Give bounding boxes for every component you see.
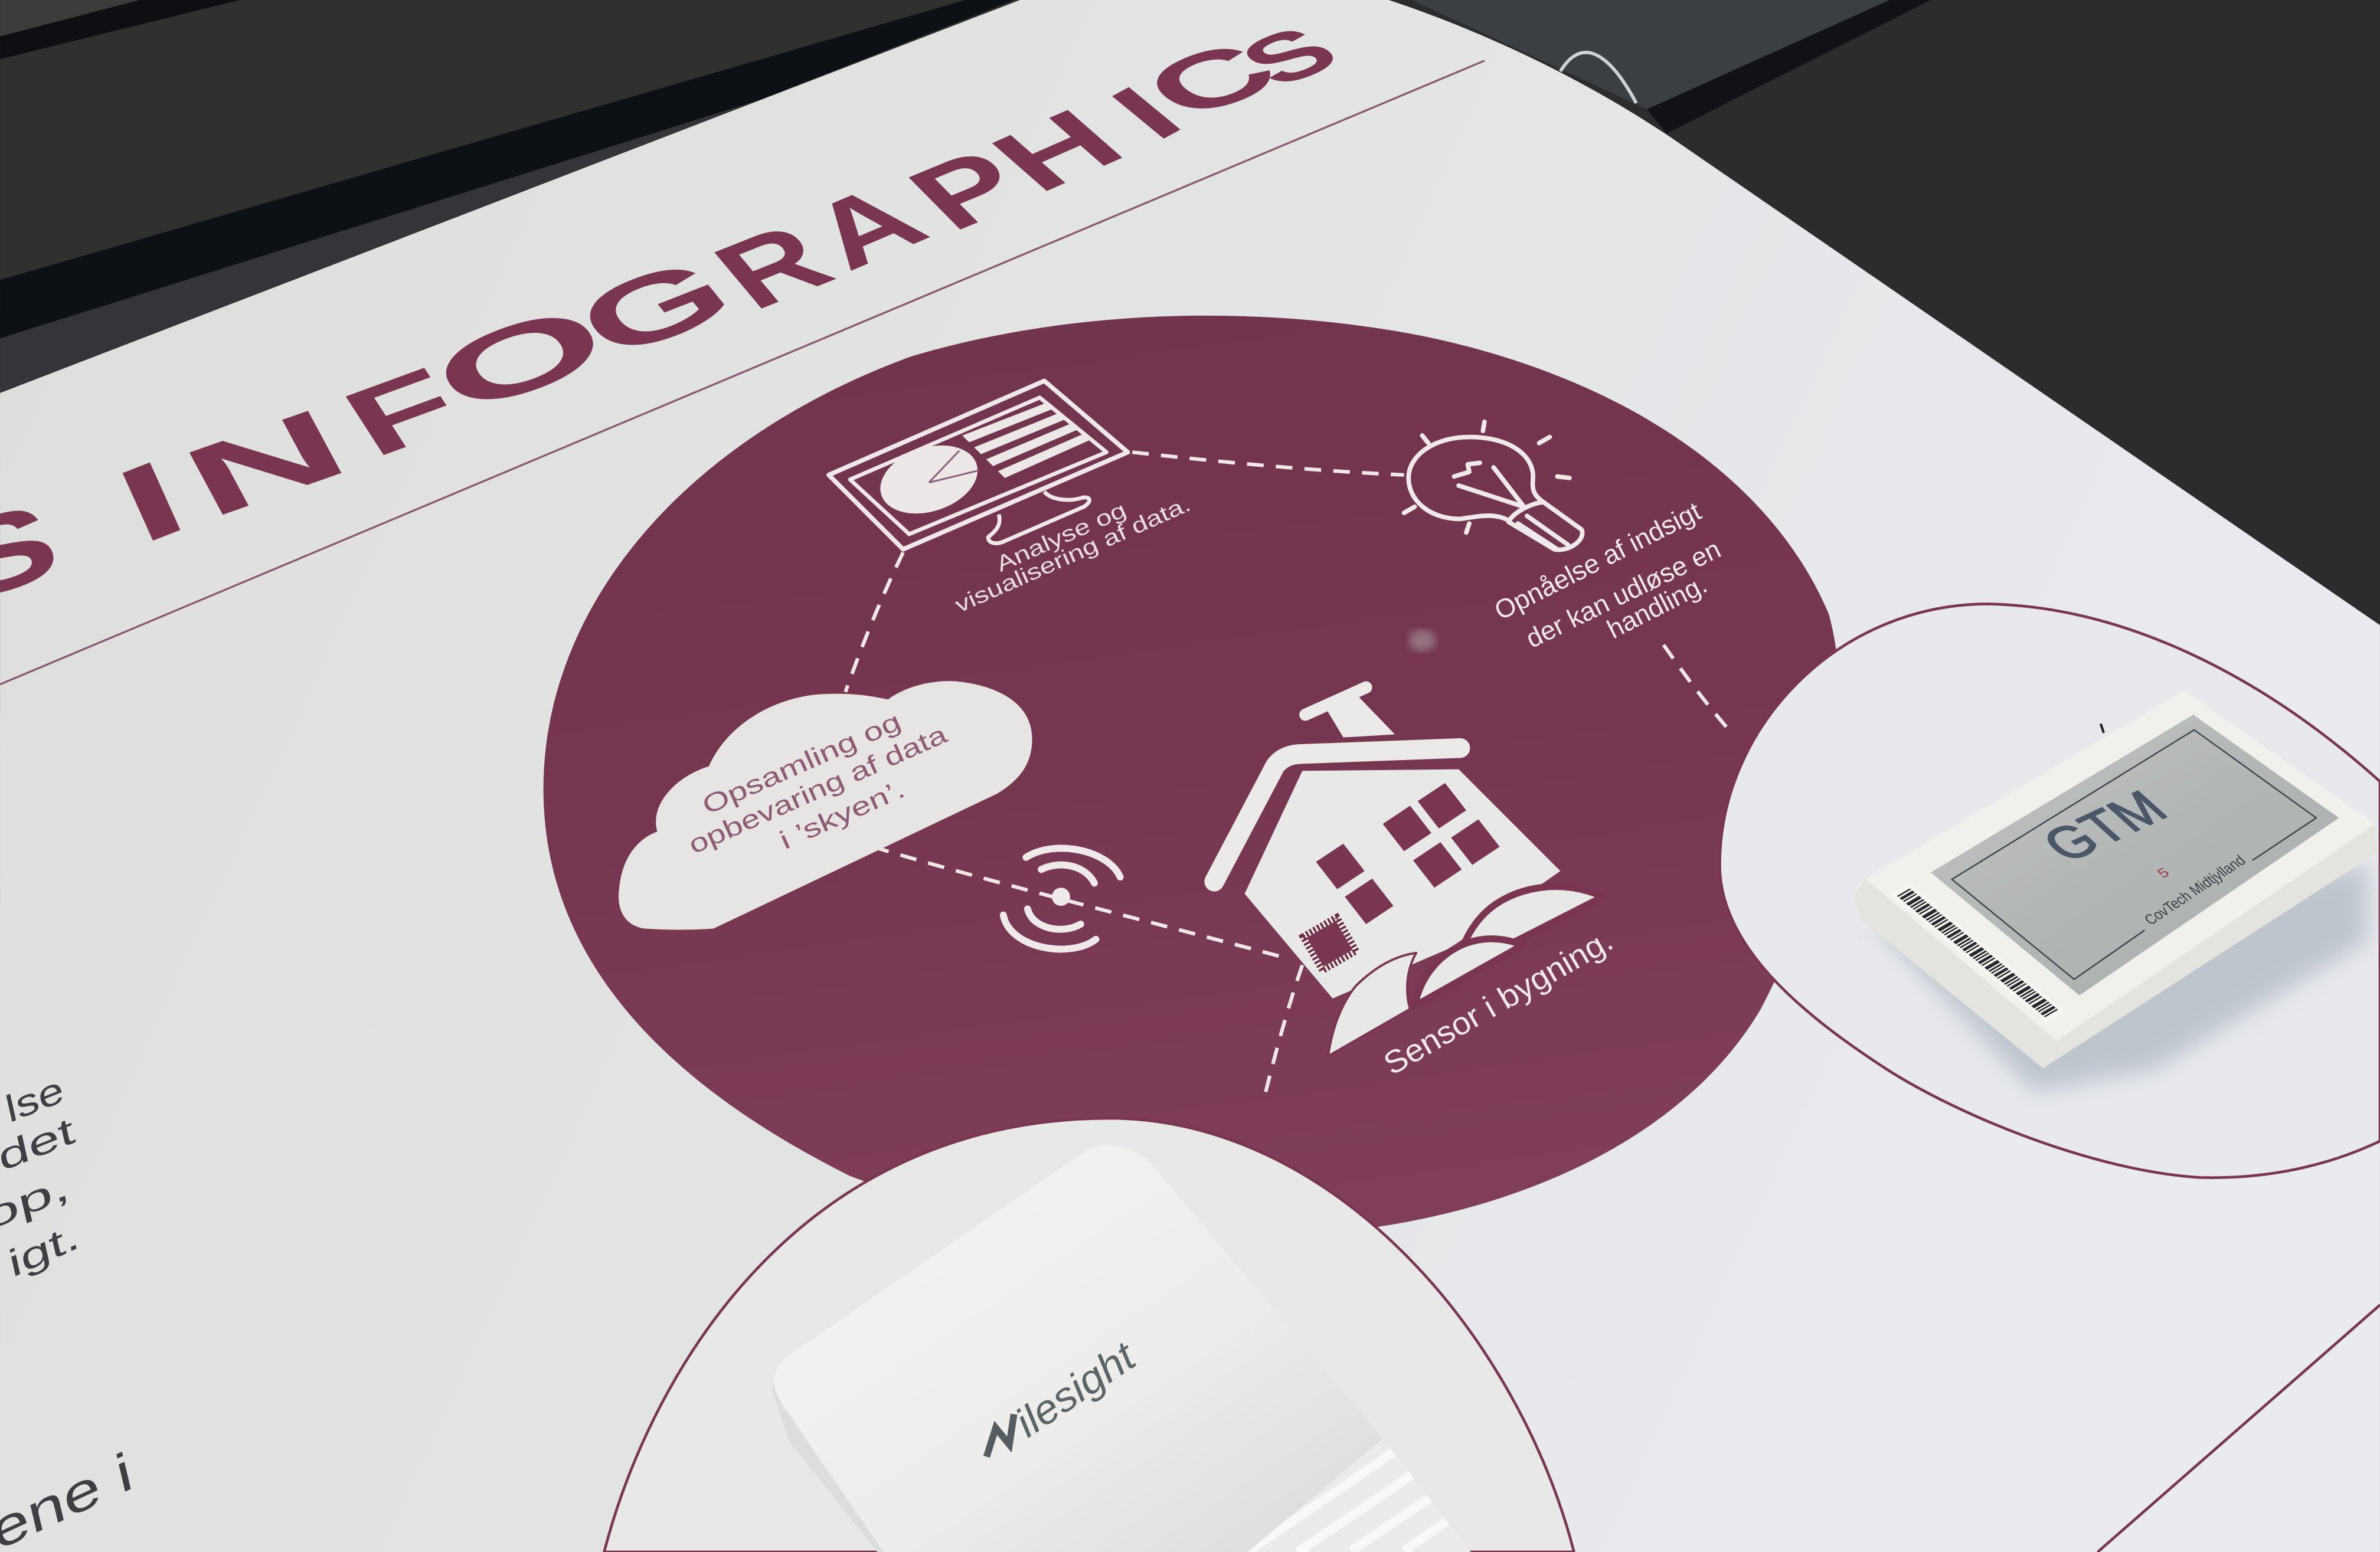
header divider line xyxy=(0,61,1485,685)
icon: house with sensor xyxy=(1214,687,1603,1056)
title: O xyxy=(409,284,631,435)
title: A xyxy=(784,165,949,290)
icon: light bulb xyxy=(1404,422,1583,550)
GTM display text: GTM xyxy=(2030,781,2180,872)
white cable xyxy=(1560,53,1636,103)
cloud label xyxy=(684,707,952,860)
title: I xyxy=(100,437,202,568)
e-ink display device: 5 xyxy=(2155,865,2173,881)
lower right frame line xyxy=(2098,1305,2380,1552)
dashed connectors xyxy=(845,452,1730,1103)
label: insight: handling. xyxy=(1602,569,1712,644)
left body text fragments xyxy=(0,1068,138,1552)
e-ink display device xyxy=(1855,690,2377,1092)
smudge on print xyxy=(1408,630,1436,651)
cloud label: i ’skyen’. xyxy=(776,774,909,855)
title: S xyxy=(1219,13,1361,101)
left body text fragments: igt. xyxy=(5,1213,83,1285)
label: analyse: visualisering af data. xyxy=(951,491,1194,617)
small black tick near device xyxy=(2101,724,2104,733)
e-ink display device: CovTech Midtjylland xyxy=(2141,853,2250,928)
cloud label: opbevaring af data xyxy=(684,719,952,860)
panel: e-ink display circle xyxy=(1719,604,2380,1178)
label: sensor: Sensor i bygning. xyxy=(1378,922,1619,1082)
cloud label: Opsamling og xyxy=(698,707,905,820)
maroon central circle xyxy=(544,316,1840,1233)
icon: wireless signal xyxy=(1003,848,1120,949)
title: G xyxy=(554,239,756,378)
title: C xyxy=(1117,27,1306,135)
label: analyse xyxy=(951,491,1194,617)
icon: monitor xyxy=(829,381,1128,549)
e-ink screen xyxy=(1931,715,2339,996)
title: F xyxy=(323,348,480,478)
title: I xyxy=(1088,70,1205,157)
label: analyse: Analyse og xyxy=(992,497,1130,577)
title: P xyxy=(885,132,1050,250)
label: insight: der kan udløse en xyxy=(1521,533,1725,654)
label: insight: Opnåelse af indsigt xyxy=(1489,496,1706,626)
Milesight sensor device xyxy=(771,1145,1471,1552)
icon: cloud with label xyxy=(619,681,1032,930)
title: R xyxy=(692,205,854,330)
Milesight logo text: ilesight xyxy=(1007,1332,1145,1446)
title: H xyxy=(967,92,1149,211)
left body text fragments: lse xyxy=(2,1068,67,1131)
barcode xyxy=(1900,889,2055,1017)
title: N xyxy=(166,387,365,540)
ventilation grille xyxy=(1245,1452,1448,1552)
sensor chip xyxy=(1303,917,1356,971)
panel: sensor device circle xyxy=(604,1118,1574,1552)
